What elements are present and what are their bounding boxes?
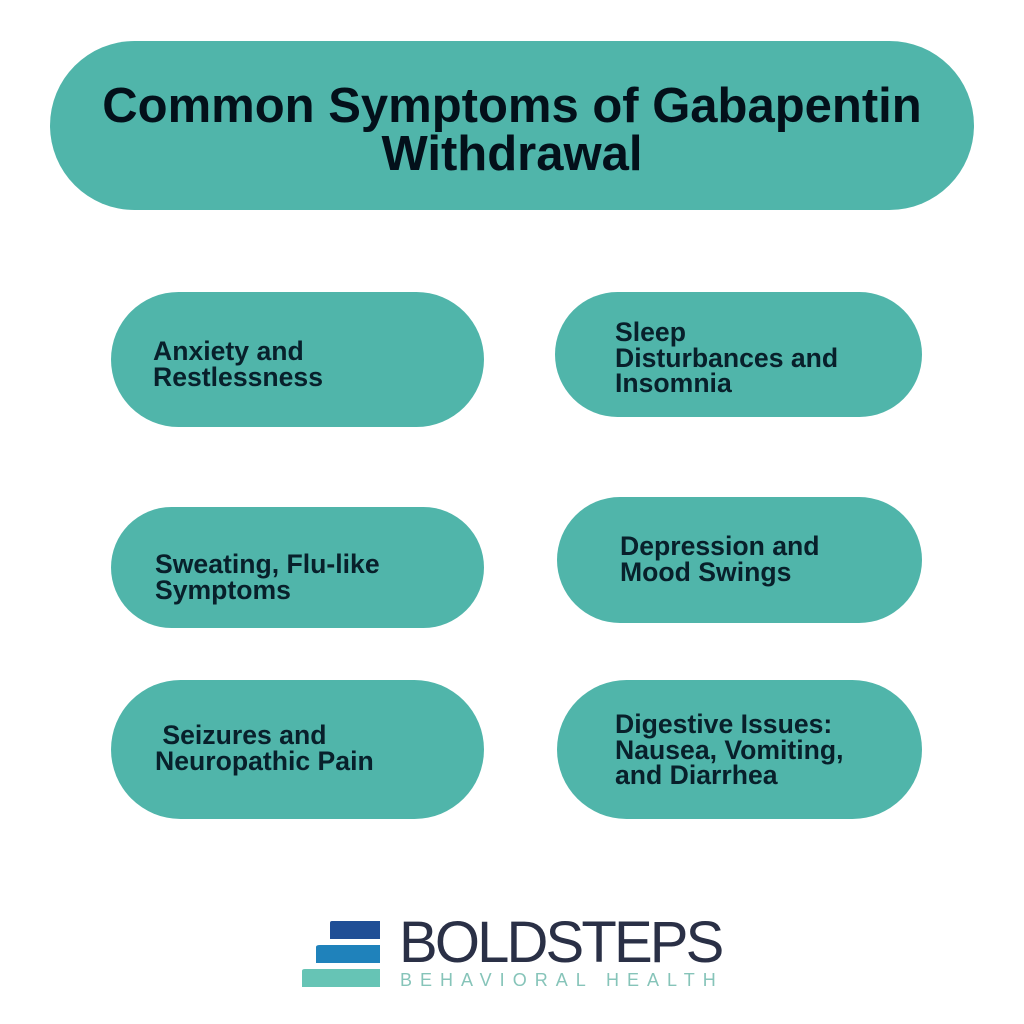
panel text: anxiety: Anxiety and xyxy=(153,336,304,366)
panel text: digestive: and Diarrhea xyxy=(615,760,778,790)
panel text: digestive: Digestive Issues: xyxy=(615,709,832,739)
panel text: digestive: Nausea, Vomiting, xyxy=(615,734,844,764)
panel text: sweating xyxy=(155,549,380,604)
wordmark: BOLDSTEPS xyxy=(399,910,721,975)
panel text: sweating: Sweating, Flu-like xyxy=(155,549,380,579)
panel: anxiety xyxy=(111,292,484,427)
panel: seizures xyxy=(111,680,484,819)
panel: depression xyxy=(557,497,922,623)
panel: digestive xyxy=(557,680,922,819)
panel text: depression xyxy=(620,531,820,586)
panel text: sleep xyxy=(615,317,838,398)
icon: stacked steps xyxy=(302,921,380,987)
panel: sweating xyxy=(111,507,484,628)
panel text: anxiety: Restlessness xyxy=(153,362,323,392)
panel text: seizures: Seizures and xyxy=(162,720,326,750)
title: Withdrawal xyxy=(382,127,642,181)
panel text: sweating: Symptoms xyxy=(155,574,291,604)
panel text: seizures xyxy=(155,720,374,776)
panel: sleep xyxy=(555,292,922,417)
panel text: sleep: Disturbances and xyxy=(615,342,838,372)
title xyxy=(102,79,922,181)
panel text: anxiety xyxy=(153,336,323,392)
panel text: depression: Depression and xyxy=(620,531,820,561)
logo xyxy=(302,910,724,990)
title: Common Symptoms of Gabapentin xyxy=(102,79,922,133)
panel text: seizures: Neuropathic Pain xyxy=(155,746,374,776)
panel text: digestive xyxy=(615,709,844,790)
panel text: depression: Mood Swings xyxy=(620,556,791,586)
title banner xyxy=(50,41,974,210)
panel text: sleep: Sleep xyxy=(615,317,686,347)
panel text: sleep: Insomnia xyxy=(615,368,732,398)
tagline: BEHAVIORAL HEALTH xyxy=(400,970,724,990)
